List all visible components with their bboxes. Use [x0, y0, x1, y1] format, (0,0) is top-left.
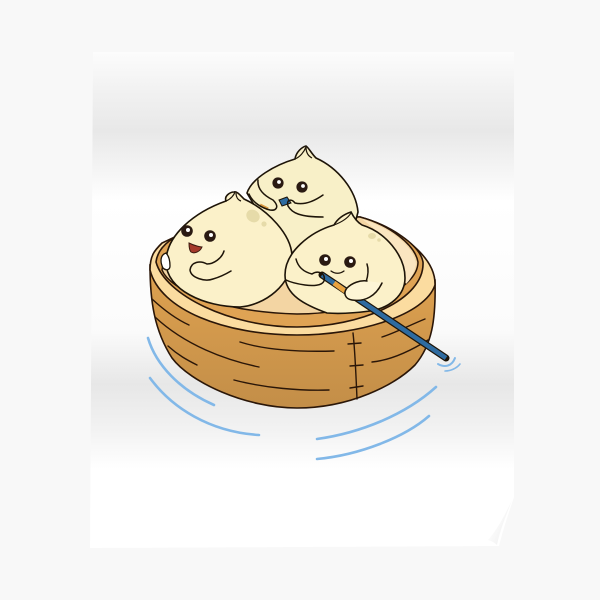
eyes	[181, 225, 193, 237]
sesame spots	[244, 207, 262, 225]
smiling mouth	[189, 243, 202, 253]
smile	[331, 271, 344, 273]
orange rim band	[156, 217, 423, 327]
arm	[190, 251, 231, 280]
inner steamer tray	[162, 215, 418, 314]
arms	[249, 180, 277, 210]
oar grip	[279, 197, 291, 206]
steamer body	[150, 265, 435, 408]
bamboo steamer	[150, 215, 435, 408]
sesame spots	[368, 233, 376, 239]
poster sheet	[90, 52, 514, 548]
bamboo grain lines	[152, 299, 428, 390]
water ripples	[148, 338, 460, 459]
dumpling: right with oar	[285, 212, 446, 358]
inner rim highlight	[362, 219, 416, 284]
right hand	[345, 281, 382, 300]
side hand	[161, 253, 170, 270]
right arm line	[366, 264, 368, 282]
dumpling: left big	[161, 192, 292, 307]
eyes	[272, 177, 284, 189]
oar	[322, 275, 446, 358]
eyes	[319, 254, 331, 266]
dumpling: top	[247, 146, 358, 262]
left arm and hand	[286, 259, 324, 286]
cream lip	[150, 217, 435, 335]
steamer seam stitching	[348, 333, 363, 399]
